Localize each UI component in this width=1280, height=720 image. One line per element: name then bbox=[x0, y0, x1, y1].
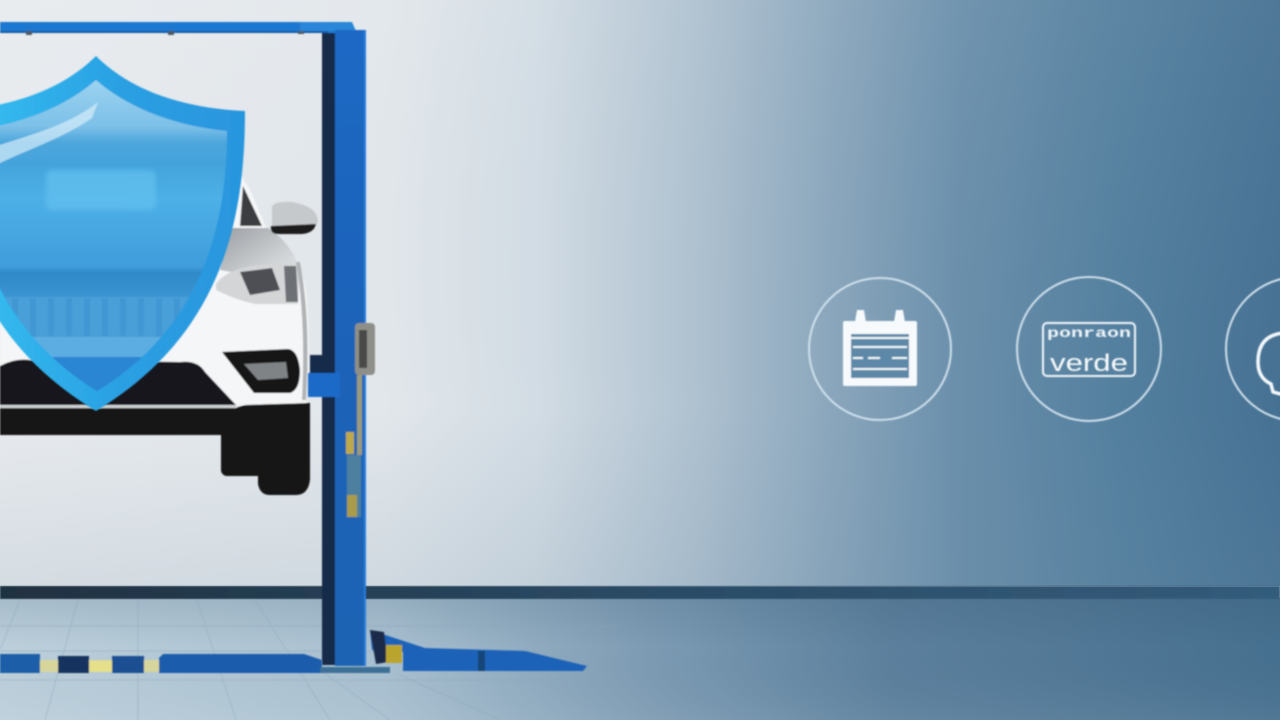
top beam bbox=[0, 22, 356, 35]
shield inner glass bbox=[0, 80, 227, 391]
front grille bbox=[0, 360, 236, 405]
side arm bbox=[308, 373, 340, 397]
car on lift bbox=[0, 170, 318, 495]
shield window reflection bbox=[46, 170, 156, 210]
base plate and runner bbox=[159, 654, 390, 673]
lift column bbox=[322, 30, 366, 666]
card outline with text: ponraon bbox=[1047, 326, 1131, 342]
lift bbox=[0, 22, 375, 666]
shield grille reflection bbox=[0, 297, 190, 337]
card outline with text: verde bbox=[1050, 350, 1128, 377]
shield highlight bbox=[0, 102, 98, 168]
calendar body bbox=[843, 310, 917, 386]
floor bbox=[0, 598, 1280, 720]
icon: card in circle bbox=[1017, 277, 1161, 421]
windscreen and hood bbox=[240, 186, 262, 226]
icon: calendar in circle bbox=[809, 278, 951, 420]
shield bumper band bbox=[33, 336, 162, 358]
fog lamp bbox=[222, 349, 300, 393]
shield bbox=[0, 56, 245, 411]
bumper stripe bbox=[0, 405, 236, 408]
lift base on floor bbox=[0, 630, 587, 673]
lower black bar bbox=[0, 403, 310, 435]
wall skirting strip bbox=[0, 586, 1280, 599]
rear tyre and wheels bbox=[221, 405, 310, 495]
wing mirror bbox=[271, 202, 318, 234]
safety bar bbox=[0, 654, 160, 673]
latch and rod bbox=[346, 323, 375, 517]
shield outer frame bbox=[0, 56, 245, 411]
headlamp bbox=[216, 264, 299, 304]
card outline with text bbox=[1043, 323, 1135, 377]
icon: speech bubble in circle, cropped bbox=[1226, 277, 1280, 421]
car side edge bbox=[296, 262, 308, 400]
ramp bbox=[370, 630, 587, 671]
car body bbox=[0, 170, 309, 405]
